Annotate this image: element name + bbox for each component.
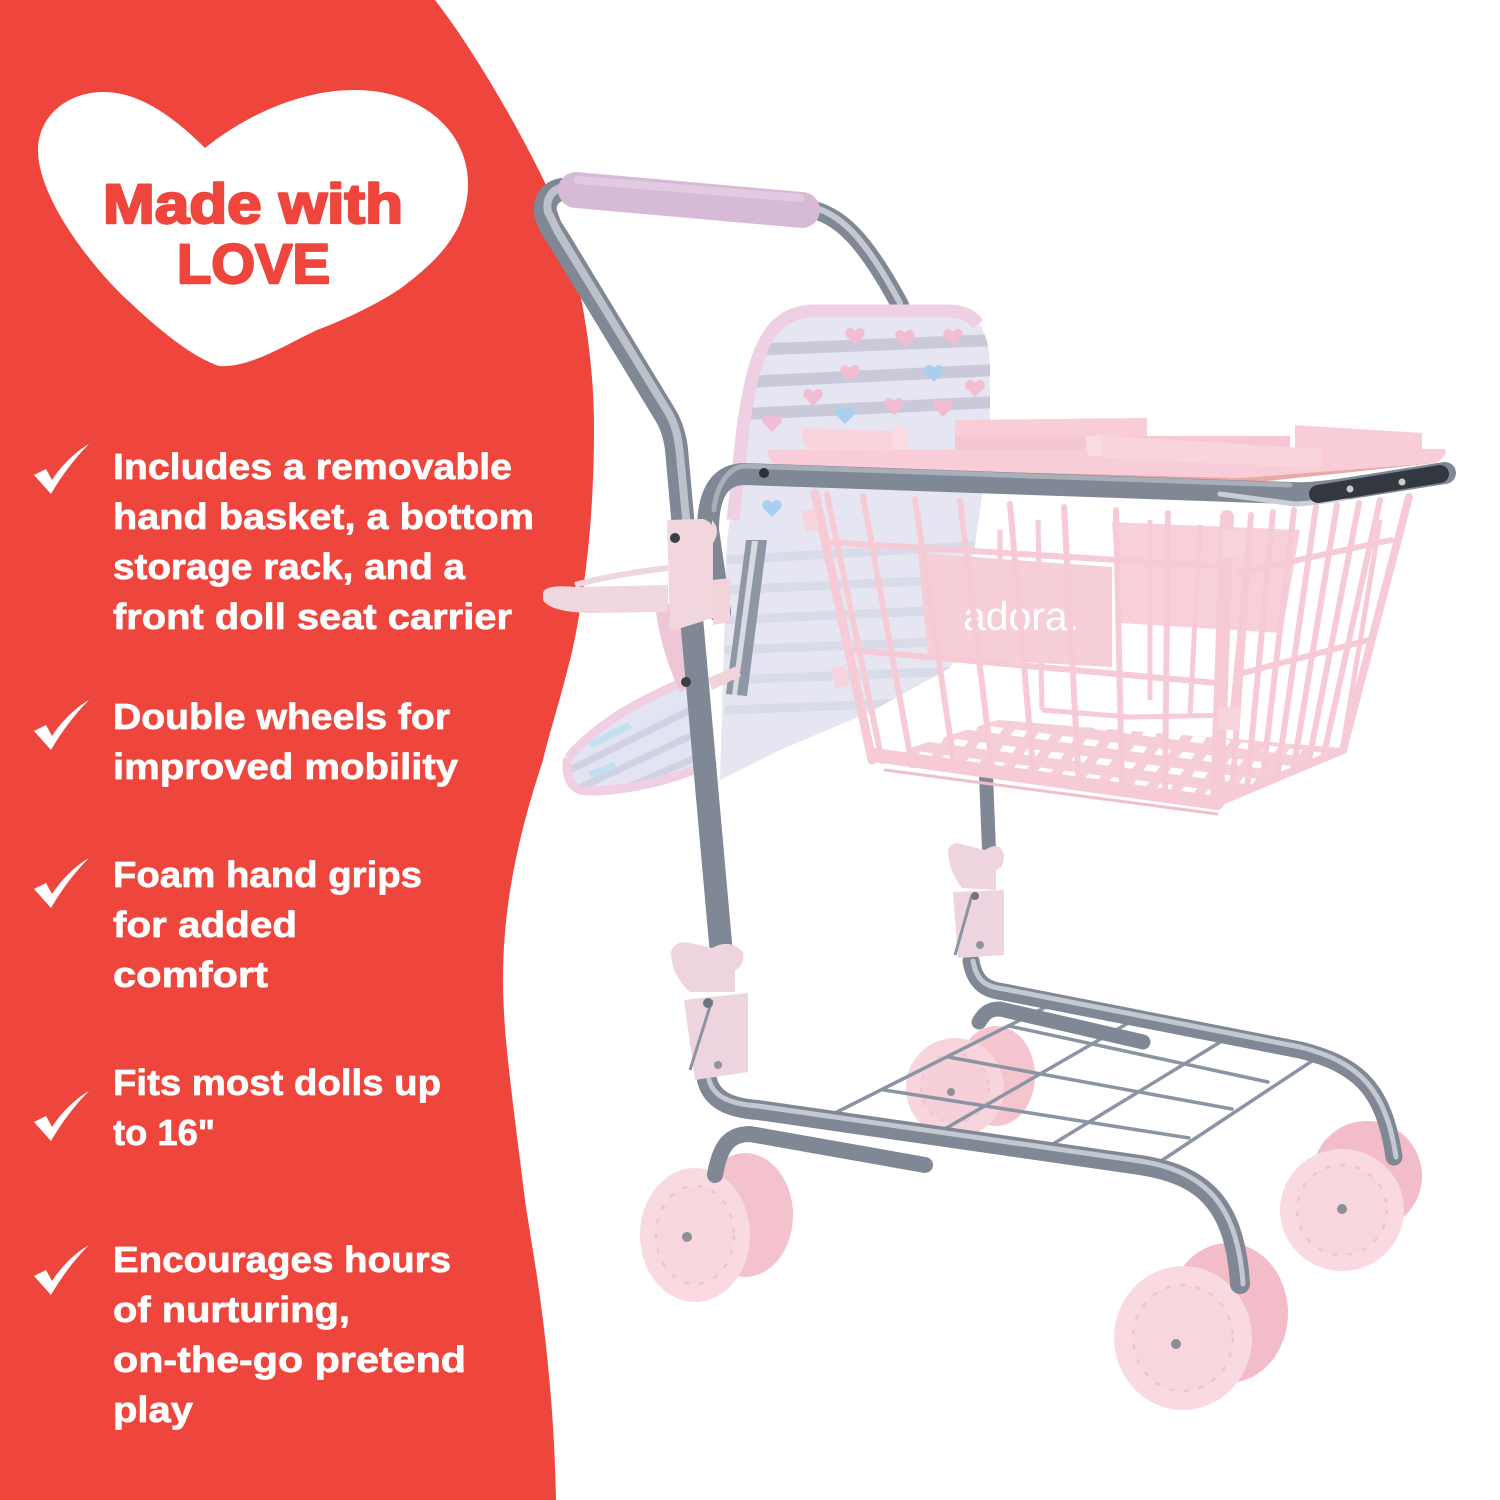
cart push bar — [708, 466, 1445, 612]
text block: of nurturing, — [113, 1289, 350, 1330]
icon: white heart — [38, 90, 468, 366]
feature: foam hand grips — [34, 854, 422, 995]
hand basket rim and handles — [768, 418, 1446, 484]
heading: Made with LOVE — [103, 172, 403, 295]
text block — [113, 1062, 441, 1153]
footrest of doll seat — [560, 675, 725, 795]
text block: to 16" — [113, 1112, 215, 1153]
logo plate — [918, 553, 1112, 667]
text block: Foam hand grips — [113, 854, 422, 895]
heading: Made with LOVE: LOVE — [177, 232, 330, 295]
icon: check mark — [34, 858, 89, 908]
basket floor grid — [872, 720, 1343, 803]
front-left wheels — [640, 1153, 793, 1302]
text block — [113, 1239, 466, 1430]
text block: Includes a removable — [113, 446, 512, 487]
feature: fits most dolls — [34, 1062, 441, 1153]
icon: check mark — [34, 700, 89, 750]
bottom storage rack — [835, 1005, 1312, 1163]
left handle tube and front post — [545, 187, 722, 960]
rear post below basket — [979, 775, 996, 850]
feature: pretend play — [34, 1239, 466, 1430]
icon: check mark — [34, 1091, 89, 1141]
foam hand grip — [576, 180, 802, 210]
feature: double wheels — [34, 696, 458, 787]
text block: for added — [113, 904, 297, 945]
pink fabric under tray — [655, 604, 702, 692]
rear-right wheels — [1280, 1121, 1422, 1271]
text block: Fits most dolls up — [113, 1062, 441, 1103]
doll seat back with hearts — [720, 306, 995, 780]
text block: on-the-go pretend — [113, 1339, 466, 1380]
text block: hand basket, a bottom — [113, 496, 534, 537]
red wavy background panel — [0, 0, 594, 1500]
icon: check mark — [34, 444, 89, 494]
logo text: adora. — [963, 595, 1079, 639]
front frame clip — [671, 942, 748, 1080]
text block: play — [113, 1389, 193, 1430]
doll tray ring — [543, 568, 668, 613]
icon: check mark — [34, 1245, 89, 1295]
text block: Double wheels for — [113, 696, 450, 737]
text block — [113, 446, 534, 637]
basket back panel — [1000, 520, 1380, 745]
text block: comfort — [113, 954, 268, 995]
basket front and side wires — [808, 493, 1409, 814]
feature: removable basket — [34, 444, 534, 637]
seat clamp — [667, 519, 730, 687]
text block: front doll seat carrier — [113, 596, 512, 637]
text block — [113, 854, 422, 995]
rear-left wheels — [906, 1026, 1035, 1138]
text block: storage rack, and a — [113, 546, 466, 587]
heading: Made with LOVE: Made with — [103, 172, 403, 235]
right rear handle tube — [806, 206, 900, 305]
rear frame clip — [948, 843, 1004, 958]
doll seat metal post — [708, 540, 767, 696]
text block: improved mobility — [113, 746, 458, 787]
shopping cart illustration — [543, 180, 1446, 1410]
front-right wheels — [1114, 1243, 1288, 1410]
lower frame tubes — [707, 961, 1396, 1284]
text block — [113, 696, 458, 787]
text block: Encourages hours — [113, 1239, 451, 1280]
heart badge with heading — [38, 90, 468, 366]
